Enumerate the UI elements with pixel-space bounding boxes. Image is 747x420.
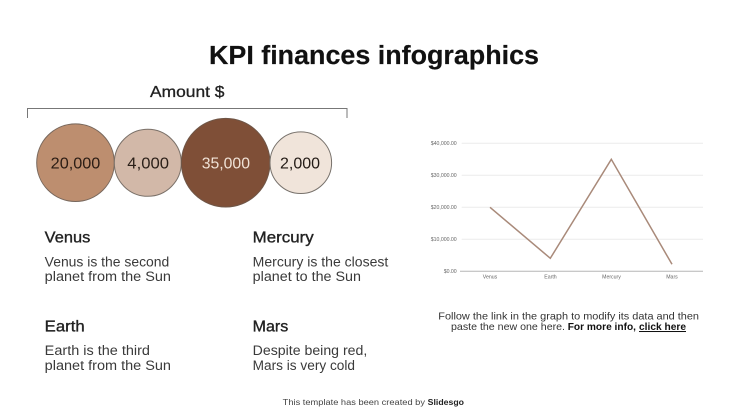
y axis labels: $40,000.00 — [431, 141, 457, 147]
chart caption: click here — [639, 322, 686, 333]
text block: Mars — [253, 319, 367, 373]
bubble: Earth 4,000: 4,000 — [127, 156, 169, 173]
title: KPI finances infographics — [209, 42, 539, 70]
x axis labels: Mercury — [602, 274, 621, 280]
text block: Mars: Despite being red, — [253, 343, 367, 358]
text block: Mars: Mars — [253, 319, 289, 336]
y axis labels: $0.00 — [444, 269, 457, 275]
footer credit: Slidesgo — [428, 397, 464, 407]
text block: Mercury — [253, 230, 389, 284]
y axis labels — [431, 141, 457, 275]
x axis labels: Mars — [666, 274, 678, 280]
x axis labels: Earth — [544, 274, 557, 280]
text block: Venus: planet from the Sun — [45, 269, 171, 284]
chart caption: For more info, — [568, 322, 636, 333]
text block: Mercury: Mercury — [253, 230, 314, 247]
chart caption: Follow the link in the graph to modify its data and then — [438, 311, 699, 322]
chart caption: paste the new one here. — [451, 322, 565, 333]
text block: Earth: Earth — [45, 319, 85, 336]
bubble: Mercury 35,000: 35,000 — [202, 156, 250, 173]
text block: Mercury: Mercury is the closest — [253, 254, 389, 269]
bubble: Mars 2,000 — [270, 132, 332, 194]
x axis labels: Venus — [483, 274, 498, 280]
text block: Mercury: planet to the Sun — [253, 269, 361, 284]
data line — [490, 159, 672, 264]
bubble: Earth 4,000 — [114, 129, 181, 196]
y axis labels: $20,000.00 — [431, 205, 457, 211]
text block: Venus: Venus — [45, 230, 91, 247]
bracket — [28, 108, 347, 118]
bubble: Venus 20,000: 20,000 — [51, 156, 100, 173]
chart caption — [438, 311, 699, 333]
text block: Venus — [45, 230, 171, 284]
text block: Earth — [45, 319, 171, 373]
footer credit: This template has been created by — [283, 397, 426, 407]
text block: Earth: planet from the Sun — [45, 358, 171, 373]
bubble group — [37, 118, 332, 207]
text block: Mars: Mars is very cold — [253, 358, 355, 373]
bubble: Mars 2,000: 2,000 — [280, 156, 320, 173]
x axis labels — [483, 274, 678, 280]
y axis labels: $10,000.00 — [431, 237, 457, 243]
y axis labels: $30,000.00 — [431, 173, 457, 179]
text block: Venus: Venus is the second — [45, 254, 169, 269]
bubble: Mercury 35,000 — [181, 118, 270, 207]
amount heading: Amount $ — [150, 84, 225, 101]
text block: Earth: Earth is the third — [45, 343, 150, 358]
bubble: Venus 20,000 — [37, 124, 114, 202]
line chart — [431, 141, 703, 280]
